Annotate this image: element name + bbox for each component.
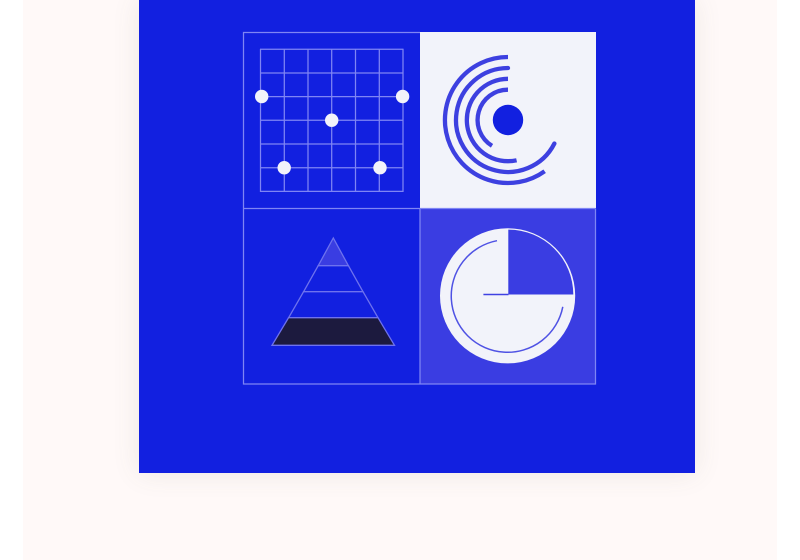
chart: inner arc: [451, 241, 563, 352]
panel: pyramid tile: [244, 208, 420, 384]
panel: radial arcs tile: [420, 32, 596, 208]
panel: scatter plot tile: [244, 32, 420, 208]
chart: pie wedge: [508, 230, 573, 294]
pyramid: second tier: [304, 266, 363, 292]
pyramid: third tier: [289, 292, 378, 318]
chart: grid lines: [260, 49, 404, 192]
chart: pyramid: [272, 238, 394, 345]
tile frame: [244, 32, 596, 384]
chart: data points: [255, 90, 409, 174]
pyramid: base tier: [272, 318, 394, 345]
chart: pie disc: [440, 228, 575, 363]
chart: centre dot: [493, 105, 523, 135]
panel: blue card: [139, 0, 695, 473]
panel: pie tile: [420, 208, 596, 384]
chart: wedge baseline: [483, 294, 508, 296]
chart: concentric arcs: [445, 57, 554, 183]
pyramid: top tier: [318, 238, 348, 266]
